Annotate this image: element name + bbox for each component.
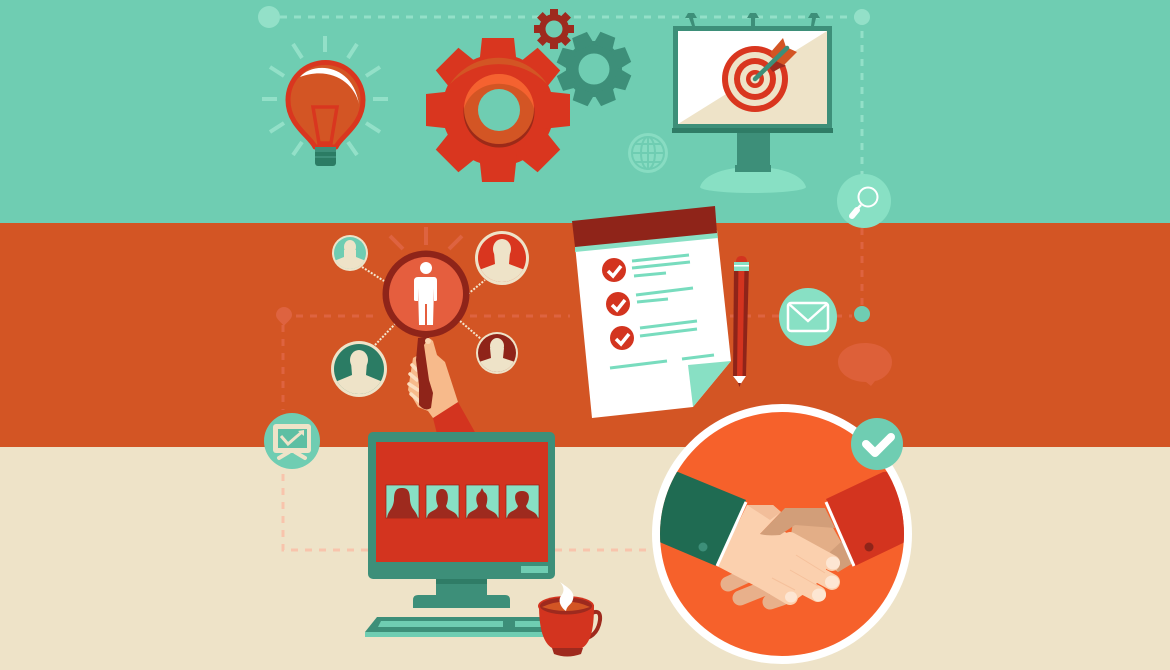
finger gaps (772, 555, 825, 590)
person figure (414, 262, 437, 325)
monitor (368, 432, 555, 608)
finger nails (785, 556, 840, 602)
icon: light bulb (262, 36, 388, 166)
keyboard (365, 617, 545, 637)
coffee (542, 602, 590, 611)
cup rim (538, 596, 594, 616)
connector node: right (854, 306, 870, 322)
badge fill (660, 412, 904, 656)
magnifier lens (382, 250, 470, 338)
icon: chart presentation circle (264, 413, 320, 469)
billboard post (735, 133, 771, 172)
text lines (610, 255, 714, 368)
monitor foot (413, 595, 510, 608)
icon: speech bubble (838, 343, 892, 386)
icon: globe (628, 133, 668, 173)
back hand thumb (760, 508, 835, 535)
avatar: green (331, 341, 387, 397)
coffee cup (538, 582, 600, 656)
thumb nail (425, 338, 431, 344)
check items (602, 258, 634, 350)
front hand palm (717, 505, 826, 604)
hand holding magnifier (408, 336, 476, 434)
background band: orange (0, 223, 1170, 447)
icon: small dark red gear (534, 9, 574, 49)
cup body (539, 605, 594, 648)
connector node: top left (258, 6, 280, 28)
palm and thumb (408, 338, 458, 418)
red cuff (826, 502, 854, 566)
billboard diagonal (678, 31, 827, 124)
badge ring (652, 404, 912, 664)
fingers (409, 365, 419, 401)
monitor screen (376, 442, 548, 562)
icon: teal gear (556, 31, 632, 107)
red sleeve button (864, 542, 874, 552)
avatar: teal small (332, 235, 368, 272)
green cuff (717, 502, 746, 566)
icon: search circle (837, 174, 891, 228)
monitor body (368, 432, 555, 579)
cup foot (552, 648, 583, 656)
avatar network (331, 231, 529, 397)
handshake (650, 470, 910, 604)
connector node: middle left pin (276, 307, 292, 326)
front hand fingers (758, 540, 832, 597)
back hand lower fingers (728, 573, 782, 602)
target (722, 38, 797, 112)
icon: large red gear (426, 38, 570, 182)
billboard (672, 13, 833, 193)
cup handle (587, 612, 600, 638)
header bar (572, 206, 717, 247)
folded corner (688, 361, 731, 407)
handshake badge (650, 404, 912, 664)
billboard shelf (672, 128, 833, 133)
background band: teal (0, 0, 1170, 223)
steam (560, 582, 573, 611)
red sleeve (826, 470, 910, 566)
green sleeve button (698, 542, 708, 552)
billboard base (700, 167, 806, 193)
green sleeve (660, 472, 746, 566)
monitor stand (436, 579, 487, 595)
avatar: dark red (476, 332, 518, 374)
billboard lamps (685, 13, 820, 26)
handle (416, 336, 433, 409)
icon: envelope circle (779, 288, 837, 346)
billboard frame (673, 26, 832, 128)
billboard panel (678, 31, 827, 124)
magnifier rays (390, 227, 462, 249)
monitor button (521, 566, 548, 573)
sleeve (433, 402, 476, 434)
icon: check badge (851, 418, 903, 470)
pencil (733, 256, 749, 387)
paper (575, 231, 731, 418)
notepad (572, 206, 731, 418)
back hand light (790, 523, 853, 572)
header strip (575, 230, 718, 252)
avatar: red (475, 231, 529, 285)
candidate photos (386, 485, 539, 518)
background band: cream (0, 447, 1170, 670)
connector node: top right (854, 9, 870, 25)
